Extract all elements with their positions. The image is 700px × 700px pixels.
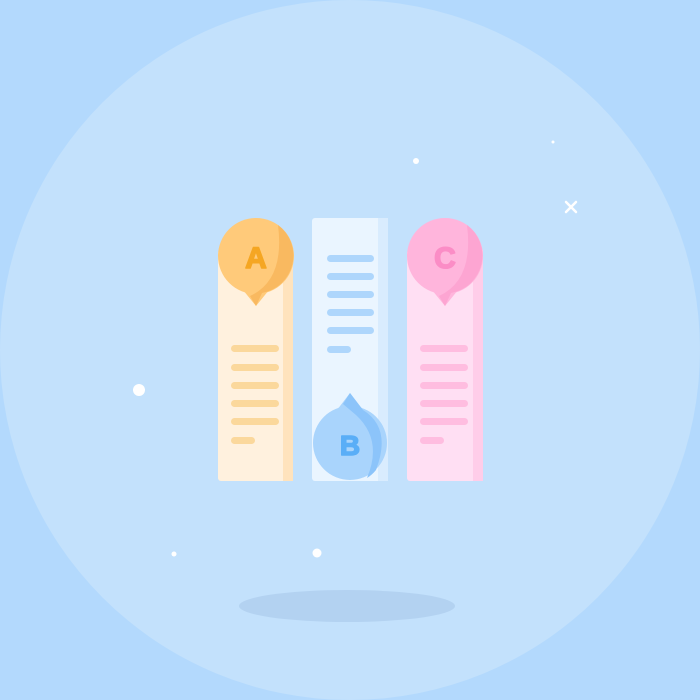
sparkles xyxy=(133,140,576,558)
pin B xyxy=(313,393,387,480)
pin A: A xyxy=(245,242,267,275)
column C xyxy=(407,218,483,481)
column A xyxy=(218,218,294,481)
pin B: B xyxy=(340,430,360,461)
column B xyxy=(312,218,388,481)
pin C xyxy=(407,218,483,306)
pin A xyxy=(218,218,294,306)
shadow xyxy=(239,590,455,622)
pin C: C xyxy=(434,242,456,275)
